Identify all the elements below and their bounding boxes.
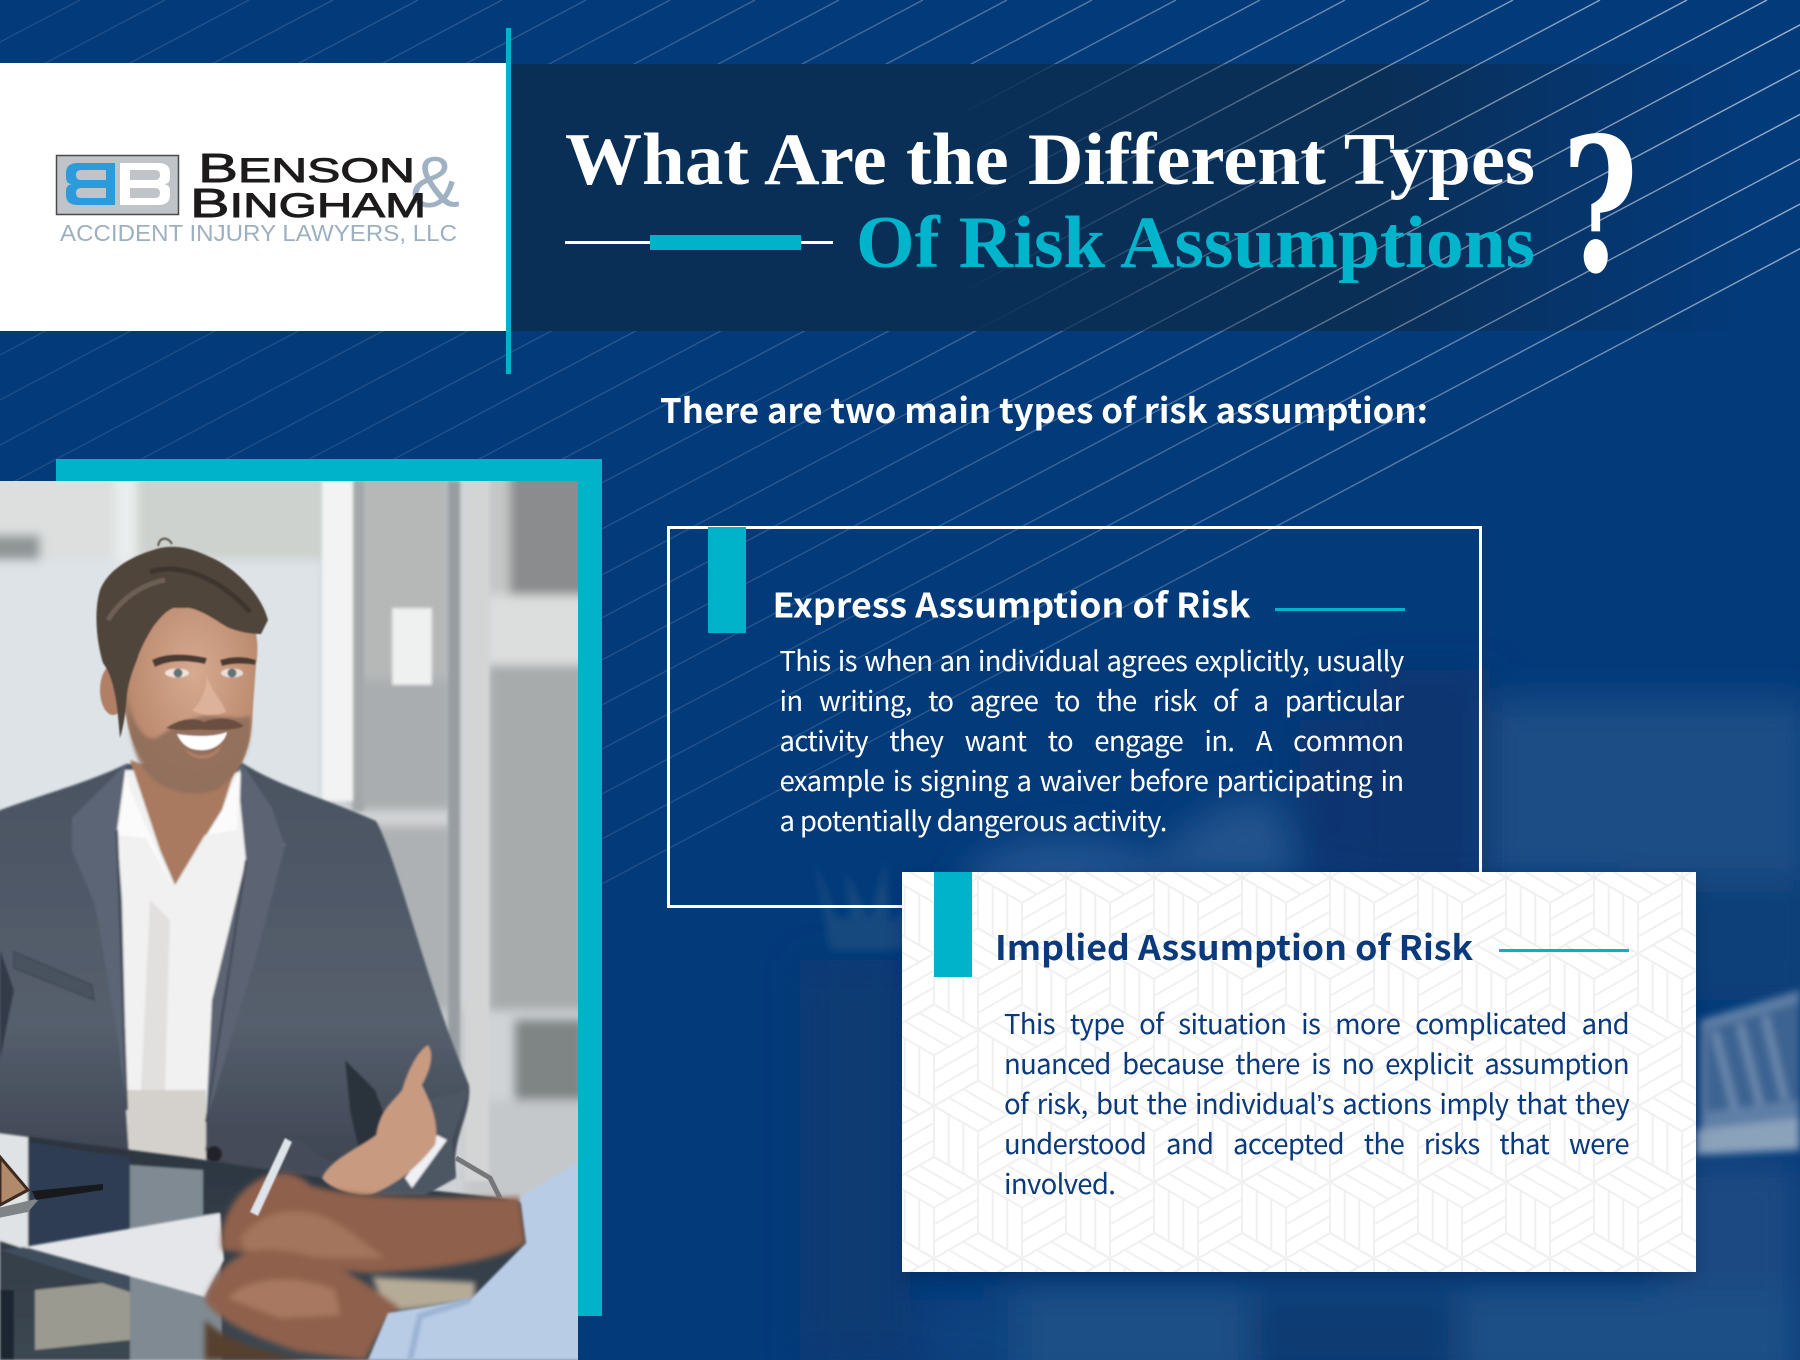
chair arm [456, 1158, 500, 1198]
glass table [0, 1133, 578, 1360]
logo name: Benson: B ENSON [198, 145, 415, 191]
panel: logo [0, 63, 506, 331]
icon: BB monogram [56, 156, 178, 214]
man hair [96, 547, 268, 738]
body text: a potentially dangerous activity. [780, 798, 1167, 838]
man beard [127, 700, 251, 793]
body text: involved. [1004, 1162, 1115, 1202]
man nose [192, 675, 226, 715]
title line 2: Of Risk Assumptions [856, 202, 1535, 284]
body text: understood and accepted the risks that were [1004, 1122, 1629, 1162]
body text: in writing, to agree to the risk of a particular [780, 678, 1404, 718]
photo: smiling man at a glass desk [0, 481, 578, 1360]
man ear [100, 665, 126, 715]
pen [250, 1138, 292, 1216]
paper document [24, 1213, 224, 1297]
body text: This type of situation is more complicated and [1004, 1002, 1629, 1042]
body text [780, 638, 1404, 838]
heading: Express Assumption of Risk [772, 579, 1251, 628]
man mouth [177, 732, 227, 750]
accent tab [708, 527, 746, 633]
man jacket [0, 762, 469, 1195]
man shirt [108, 770, 285, 1170]
body text: nuanced because there is no explicit assumption [1004, 1042, 1629, 1082]
body text: example is signing a waiver before participating in [780, 758, 1404, 798]
man sleeve shadow [345, 1060, 390, 1155]
logo name: Bingham: B INGHAM [190, 180, 426, 226]
man eyes and brows [152, 654, 207, 667]
photo frame: teal [56, 459, 602, 1316]
accent tab [934, 872, 972, 977]
man neck [130, 760, 238, 885]
panel: implied assumption of risk [902, 872, 1696, 1272]
heading: Implied Assumption of Risk [995, 922, 1473, 970]
man collar [118, 770, 172, 885]
client hands and pen [205, 1173, 526, 1360]
heading rule [1499, 949, 1629, 952]
tablet and phone on table [0, 1157, 103, 1218]
subheading: There are two main types of risk assumption: [660, 385, 1428, 433]
title band: dark fading panel [1034, 64, 1648, 331]
tile pattern [902, 872, 1696, 1272]
logo ampersand: & [410, 143, 460, 223]
title band: left part hiding lines [511, 64, 1280, 331]
man gesturing hand [322, 1045, 468, 1195]
body text [1004, 1002, 1630, 1202]
heading rule [1274, 608, 1404, 610]
body text: This is when an individual agrees explicitly, usually [780, 638, 1404, 678]
panel: express assumption of risk [667, 526, 1482, 908]
vertical teal divider [506, 28, 511, 374]
man pocket [14, 952, 94, 1000]
man lapels [72, 764, 127, 1110]
body text: of risk, but the individual’s actions imply that they [1004, 1082, 1629, 1122]
client sleeve [368, 1161, 580, 1360]
man head [118, 594, 257, 792]
title [565, 110, 1638, 290]
logo tagline: ACCIDENT INJURY LAWYERS, LLC [60, 220, 457, 246]
title line 1: What Are the Different Types [565, 119, 1535, 201]
body text: activity they want to engage in. A common [780, 718, 1404, 758]
title accent rule [565, 235, 833, 250]
